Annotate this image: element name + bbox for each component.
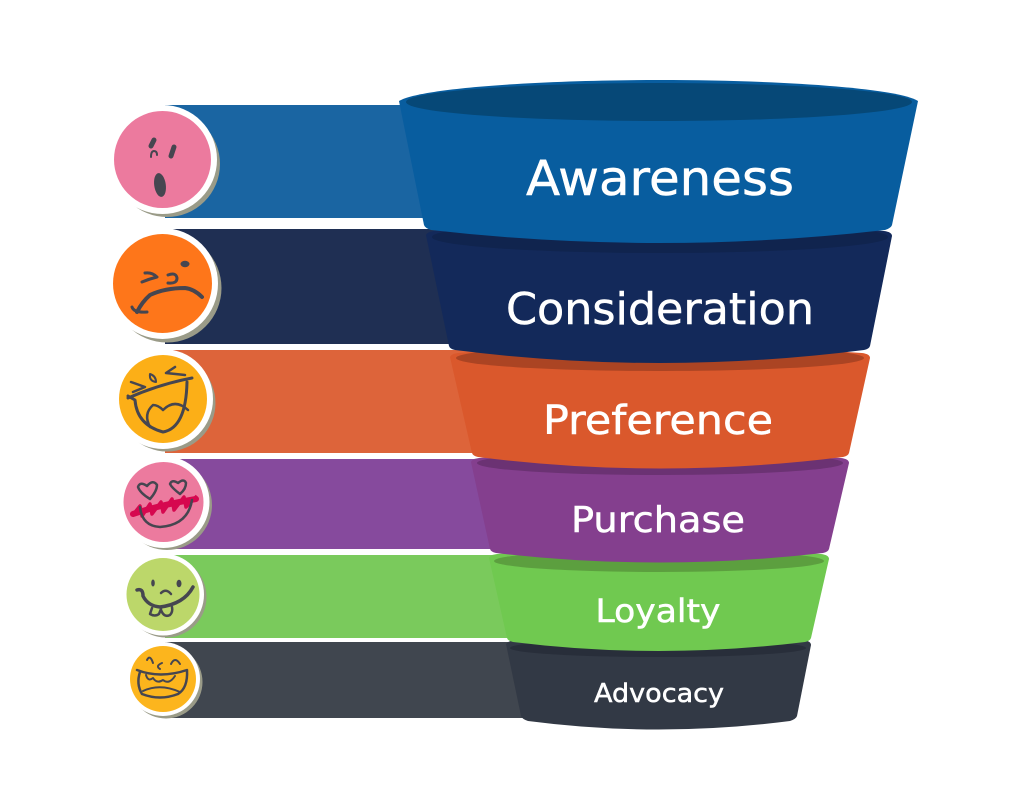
funnel segment: awareness <box>399 80 918 243</box>
funnel segment: advocacy <box>506 632 811 730</box>
icon: goofy green face <box>122 554 206 638</box>
funnel segment: preference: Preference <box>543 398 773 444</box>
funnel segment: purchase: Purchase <box>571 500 745 541</box>
funnel segment: consideration <box>426 221 892 363</box>
funnel segment: advocacy: Advocacy <box>594 679 724 709</box>
funnel segment: loyalty: Loyalty <box>596 592 720 630</box>
bar: consideration <box>165 229 460 344</box>
funnel segment: awareness: Awareness <box>526 151 794 207</box>
bar: preference <box>165 350 480 453</box>
funnel opening <box>406 83 912 121</box>
icon: surprised face <box>108 105 220 217</box>
funnel segment: purchase <box>471 451 849 562</box>
icon: laughing yellow face <box>113 349 216 452</box>
funnel segment: loyalty <box>489 547 829 651</box>
bar: awareness <box>165 105 435 218</box>
funnel segment: preference <box>450 345 870 468</box>
funnel segment: consideration: Consideration <box>506 284 814 335</box>
icon: grinning yellow face <box>126 642 202 718</box>
bar: loyalty <box>165 555 515 638</box>
icon: heart-eyes face <box>118 456 212 550</box>
icon: frowning orange face <box>107 228 222 342</box>
bar: advocacy <box>165 642 530 718</box>
bar: purchase <box>165 459 500 549</box>
